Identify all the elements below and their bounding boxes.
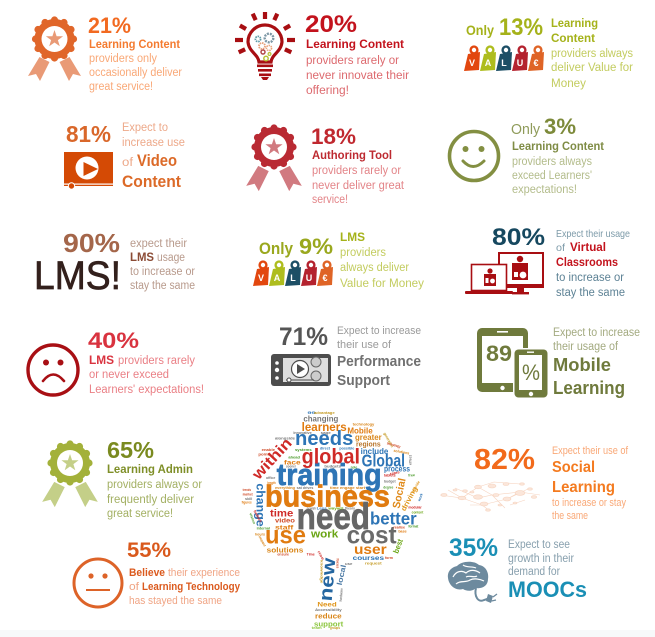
word cloud tree: use: [345, 562, 352, 566]
word cloud tree: greater: [355, 433, 382, 442]
word cloud tree: cost: [347, 522, 397, 549]
word cloud tree: changing: [303, 415, 338, 424]
text: social learning description: the same: [552, 510, 588, 522]
word cloud tree: Social: [391, 477, 409, 510]
stat: 40%: 40%: [88, 328, 139, 353]
panel: 71% performance support: [271, 323, 421, 389]
word cloud tree: support: [314, 620, 344, 629]
stat: only 13%: Only: [466, 22, 494, 38]
word cloud tree: form: [385, 556, 394, 560]
word cloud tree: regions: [356, 439, 381, 448]
word cloud tree: focus: [336, 558, 340, 568]
stat: only 9%: 9%: [299, 234, 333, 259]
text: performance support description: Support: [337, 372, 390, 389]
stat: 71%: 71%: [279, 323, 328, 351]
stat: 80%: 80%: [492, 224, 545, 251]
word cloud tree: trends: [243, 488, 251, 492]
text: 18% description: providers rarely or: [312, 165, 401, 177]
word cloud tree: ahead: [288, 455, 300, 459]
text: 13% description: Content: [551, 33, 595, 45]
word cloud tree: way: [327, 506, 338, 510]
icon: handheld video device: [271, 354, 331, 386]
word cloud tree: global: [302, 444, 360, 468]
stat: only 9%: [259, 234, 333, 259]
text: MOOCs description: [508, 539, 587, 602]
panel: 65% learning admin: [42, 437, 202, 520]
text: social learning description: Social: [552, 459, 595, 476]
text: LMS usage description: stay the same: [130, 280, 195, 292]
word cloud tree: Accessibility: [315, 608, 343, 612]
word cloud tree: feedback: [252, 509, 263, 524]
word cloud tree: realise: [393, 525, 405, 529]
icon: light bulb with gears: [235, 12, 295, 80]
word cloud tree: [242, 411, 424, 630]
word cloud tree: market: [243, 493, 253, 497]
word cloud tree: solutions: [267, 545, 303, 554]
word cloud tree: free: [408, 473, 415, 478]
text: 55% description: Learning Technology: [142, 581, 241, 593]
text: 18% description: service!: [312, 194, 348, 206]
word cloud tree: Need: [317, 601, 337, 608]
icon: value price tags: [253, 262, 333, 286]
text: video content description: Video: [137, 152, 177, 170]
text: 21% description: providers only: [89, 53, 157, 65]
text: performance support description: Expect to increase: [337, 325, 421, 337]
text: mobile learning description: their usage of: [553, 341, 619, 353]
word cloud tree: advantage: [314, 411, 335, 415]
word cloud tree: better: [370, 508, 417, 528]
word cloud tree: need: [297, 495, 370, 537]
word cloud tree: direct: [320, 447, 331, 451]
word cloud tree: knowledge: [320, 560, 324, 583]
word cloud tree: rates: [389, 470, 400, 476]
icon: value price tags: V: [258, 273, 264, 283]
word cloud tree: length: [267, 481, 276, 485]
text: LMS usage description: usage: [157, 252, 185, 264]
word cloud tree: groups: [330, 626, 340, 630]
text: 40% description: Learners' expectations!: [89, 384, 204, 396]
text: social learning description: Expect their use of: [552, 445, 629, 457]
word cloud tree: change: [254, 483, 268, 527]
word cloud tree: effect: [409, 454, 413, 465]
stat: only 13%: [466, 14, 543, 41]
text: 9% description: LMS: [340, 232, 365, 244]
word cloud tree: newish: [307, 506, 316, 510]
text: video content description: [122, 122, 185, 191]
text: 9% description: [340, 232, 424, 290]
text: 65% description: great service!: [107, 508, 173, 520]
icon: green award badge: [42, 440, 98, 507]
text: 21% description: [89, 39, 182, 93]
text: performance support description: [337, 325, 421, 389]
text: video content description: Expect to: [122, 122, 168, 134]
text: virtual classrooms description: of: [556, 242, 565, 254]
text: performance support description: their use of: [337, 339, 392, 351]
icon: red award badge: [246, 124, 302, 191]
text: social learning description: [552, 445, 629, 522]
icon: faded social network: [440, 482, 540, 511]
text: 20% description: [306, 39, 409, 97]
panel: 9% LMS value: [253, 232, 424, 290]
word cloud tree: Global: [362, 451, 405, 471]
text: 20% description: Learning Content: [306, 39, 404, 51]
icon: video player: [64, 152, 113, 189]
word cloud tree: new: [315, 556, 339, 602]
word cloud tree: tablets: [384, 474, 396, 478]
panel: 20% innovation: [235, 11, 409, 97]
text: MOOCs description: demand for: [508, 566, 560, 578]
word cloud tree: sooner: [286, 465, 296, 469]
text: virtual classrooms description: Virtual: [570, 242, 606, 254]
word cloud tree: best: [391, 538, 405, 555]
text: 9% description: Value for Money: [340, 278, 424, 290]
word cloud tree: process: [384, 465, 410, 474]
word cloud tree: use: [265, 522, 306, 549]
text: mobile learning description: [553, 327, 640, 398]
word cloud tree: needs: [295, 427, 353, 450]
panel: 89% mobile learning: [477, 327, 640, 400]
word cloud tree: hardware: [339, 588, 344, 602]
text: 13% description: deliver Value for: [551, 62, 633, 74]
word cloud tree: theory: [345, 506, 356, 510]
panel: 40% LMS expectations: [28, 328, 204, 396]
text: 9% description: providers: [340, 247, 386, 259]
text: 3% description: expectations!: [512, 184, 577, 196]
icon: value price tags: U: [306, 273, 312, 283]
text: 20% description: providers rarely or: [306, 55, 399, 67]
icon: smiling face: [450, 132, 498, 180]
text: LMS usage description: expect their: [130, 238, 187, 250]
word cloud tree: business: [265, 480, 390, 514]
text: 3% description: exceed Learners': [512, 170, 592, 182]
icon: value price tags: A: [485, 58, 492, 68]
word cloud tree: budget: [384, 480, 396, 484]
text: MOOCs description: MOOCs: [508, 577, 587, 602]
stat: only 3%: Only: [511, 121, 540, 138]
word cloud tree: office: [266, 476, 275, 480]
icon: neutral face: [74, 559, 122, 607]
text: 55% description: their experience: [168, 567, 240, 579]
text: 3% description: providers always: [512, 156, 592, 168]
icon: value price tags: [464, 47, 544, 71]
word cloud tree: reduce: [315, 611, 342, 620]
stat: 18%: 18%: [311, 124, 356, 149]
word cloud tree: internal: [257, 526, 270, 530]
panel: 81% video content: [64, 121, 185, 191]
word cloud tree: solutions: [393, 449, 410, 455]
text: 13% description: [551, 18, 633, 90]
text: 65% description: Learning Admin: [107, 464, 193, 476]
word cloud tree: format: [408, 525, 419, 529]
bottom band: [0, 630, 655, 637]
text: LMS usage description: [130, 238, 195, 292]
text: MOOCs description: Expect to see: [508, 539, 570, 551]
text: 65% description: [107, 464, 202, 520]
word cloud tree: user: [354, 541, 387, 557]
text: 18% description: [312, 150, 405, 206]
text: virtual classrooms description: Expect their usage: [556, 228, 630, 240]
icon: tablet and phone with 89%: 89: [486, 341, 512, 366]
word cloud tree: rise: [316, 550, 325, 561]
text: 21% description: Learning Content: [89, 39, 180, 51]
panel: 35% MOOCs: [448, 534, 587, 603]
word cloud tree: everything: [275, 486, 295, 490]
panel: 90% LMS: [34, 228, 195, 298]
text: 20% description: never innovate their: [306, 70, 409, 82]
word cloud tree: possible: [339, 447, 354, 451]
panel: 13% value for money: [464, 14, 633, 90]
icon: sad face: [28, 345, 78, 395]
icon: monitor and laptop presenters: [465, 253, 544, 294]
text: 20% description: offering!: [306, 85, 349, 97]
word cloud tree: request: [365, 561, 383, 565]
word cloud tree: face: [284, 459, 301, 466]
word cloud tree: 99: [307, 411, 316, 415]
word cloud tree: Time: [307, 553, 315, 557]
text: virtual classrooms description: stay the same: [556, 287, 625, 299]
panel: 80% virtual classrooms: [465, 224, 630, 299]
stat: only 9%: Only: [259, 239, 293, 258]
panel: 82% social learning: [440, 444, 629, 522]
text: mobile learning description: Mobile: [553, 355, 611, 375]
icon: value price tags: €: [322, 273, 328, 283]
stat: 90%: 90%: [63, 228, 120, 258]
text: mobile learning description: Learning: [553, 378, 625, 398]
text: 40% description: [89, 355, 204, 396]
word cloud tree: provide: [411, 480, 421, 494]
word cloud tree: modular: [408, 505, 422, 509]
word cloud tree: local: [335, 564, 348, 586]
text: 55% description: has stayed the same: [129, 595, 222, 607]
icon: value price tags: €: [533, 58, 539, 68]
word cloud tree: ensure: [277, 553, 289, 557]
text: 55% description: [129, 567, 241, 607]
text: 65% description: providers always or: [107, 479, 202, 491]
text: performance support description: Performance: [337, 353, 421, 370]
stat: 81%: 81%: [66, 121, 111, 147]
text: video content description: increase use: [122, 137, 185, 149]
text: 55% description: of: [129, 581, 140, 593]
text: 13% description: providers always: [551, 48, 633, 60]
word cloud tree: time engage start: [330, 486, 366, 490]
text: 40% description: or never exceed: [89, 369, 169, 381]
text: LMS usage description: LMS: [130, 252, 154, 264]
word cloud tree: video: [275, 517, 295, 524]
icon: value price tags: U: [517, 58, 523, 68]
word cloud tree: learners: [302, 420, 347, 434]
word cloud tree: content: [412, 510, 424, 514]
panel: 55% learning technology: [74, 539, 241, 607]
stat: 55%: 55%: [127, 539, 171, 562]
word cloud tree: include: [361, 446, 389, 456]
word cloud tree: well: [336, 506, 343, 510]
text: MOOCs description: growth in their: [508, 553, 574, 565]
text: 9% description: always deliver: [340, 262, 409, 274]
word cloud tree: work: [417, 492, 424, 503]
word cloud tree: Less: [317, 506, 327, 510]
text: virtual classrooms description: Classrooms: [556, 257, 618, 269]
word cloud tree: base: [398, 529, 407, 533]
word cloud tree: sage: [321, 431, 331, 435]
text: 40% description: LMS: [89, 355, 114, 367]
stat: only 3%: 3%: [544, 114, 576, 139]
icon: orange award badge: [28, 16, 81, 81]
text: 18% description: Authoring Tool: [312, 150, 392, 162]
icon: value price tags: V: [469, 58, 475, 68]
word cloud tree: work: [310, 529, 338, 541]
word cloud tree: hours: [255, 533, 265, 537]
word cloud tree: sat drives: [297, 486, 313, 490]
stat: 20%: 20%: [305, 11, 357, 38]
stat: 21%: 21%: [88, 13, 131, 38]
word cloud tree: Innovative: [293, 431, 312, 435]
word cloud tree: budgets: [324, 465, 341, 469]
text: 21% description: occasionally deliver: [89, 67, 182, 79]
word cloud tree: courses: [353, 555, 384, 562]
word cloud tree: time: [270, 509, 294, 520]
icon: value price tags: A: [274, 273, 281, 283]
word cloud tree: vision: [248, 512, 256, 525]
icon: tablet and phone with 89%: %: [522, 360, 540, 385]
text: video content description: Content: [122, 173, 181, 191]
word cloud tree: training: [277, 458, 382, 492]
text: LMS usage description: to increase or: [130, 266, 195, 278]
text: 40% description: providers rarely: [118, 355, 195, 367]
text: social learning description: to increase or stay: [552, 497, 626, 509]
word cloud tree: point: [258, 453, 270, 457]
word cloud tree: technology: [386, 441, 402, 449]
text: virtual classrooms description: to increase or: [556, 272, 624, 284]
icon: brain with plug: [448, 562, 497, 603]
text: 13% description: Learning: [551, 18, 598, 30]
text: 21% description: great service!: [89, 81, 153, 93]
text: 65% description: frequently deliver: [107, 494, 194, 506]
word cloud tree: Mobile: [347, 426, 373, 435]
word cloud tree: driving: [399, 485, 419, 513]
icon: value price tags: L: [290, 273, 296, 283]
word cloud tree: team: [312, 626, 323, 630]
stat: only 3%: [511, 114, 576, 139]
text: 13% description: Money: [551, 78, 586, 90]
icon: tablet and phone with 89%: [477, 328, 549, 400]
word cloud tree: enable: [262, 448, 275, 452]
stat: only 13%: 13%: [499, 14, 543, 41]
heading: LMS!: LMS!: [34, 254, 121, 298]
text: mobile learning description: Expect to increase: [553, 327, 640, 339]
text: 55% description: Believe: [129, 567, 165, 579]
panel: 3% exceed expectations: [450, 114, 604, 196]
text: social learning description: Learning: [552, 479, 615, 496]
stat: 65%: 65%: [107, 437, 154, 463]
word cloud tree: figures: [242, 501, 252, 505]
word cloud tree: technology: [353, 423, 375, 427]
word cloud tree: degree: [383, 485, 393, 489]
stat: 82%: 82%: [474, 444, 535, 476]
icon: value price tags: L: [501, 58, 507, 68]
word cloud tree: alongside: [275, 437, 295, 441]
word cloud tree: staff: [275, 524, 294, 531]
panel: 18% authoring tool: [246, 124, 405, 206]
word cloud tree: within: [248, 435, 296, 484]
word cloud tree: role: [351, 465, 357, 469]
text: 3% description: [512, 141, 604, 196]
panel: 21% learning content service: [28, 13, 182, 93]
text: video content description: of: [122, 157, 134, 169]
word cloud tree: impact: [257, 535, 267, 548]
word cloud tree: generation: [382, 432, 394, 448]
word cloud tree: systems: [295, 448, 312, 452]
text: 3% description: Learning Content: [512, 141, 604, 153]
text: virtual classrooms description: [556, 228, 630, 299]
text: 18% description: never deliver great: [312, 180, 405, 192]
word cloud tree: skill: [245, 497, 252, 501]
stat: 35%: 35%: [449, 534, 498, 562]
